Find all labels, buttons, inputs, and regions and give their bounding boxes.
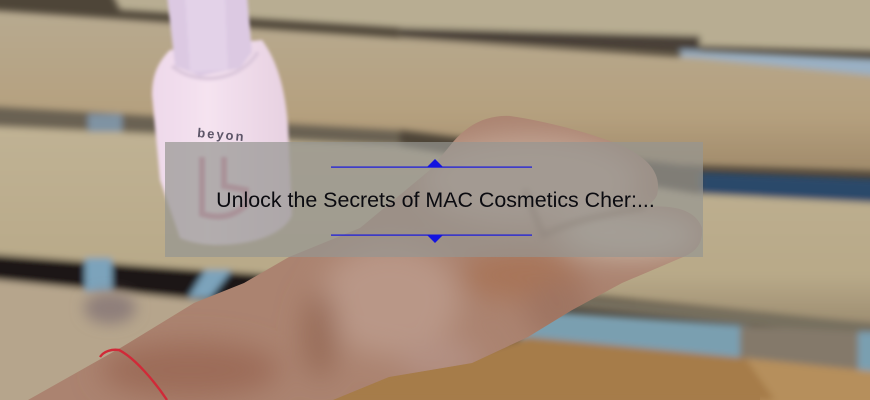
bottle pink logo [202, 157, 246, 217]
base skin [28, 116, 702, 400]
finger crease [572, 212, 617, 224]
plank edge: right [560, 296, 870, 340]
brown gap right lower [740, 326, 858, 374]
neck highlight [185, 0, 228, 72]
support shadow on plank [84, 292, 136, 324]
dark seam [400, 28, 700, 50]
bench supports [88, 114, 122, 132]
wooden plank: bottom-left [0, 276, 240, 400]
bottle [152, 0, 292, 245]
skin shading [100, 135, 700, 398]
blue gap right lower [520, 310, 750, 360]
bottle body [152, 40, 292, 245]
wooden plank: top [95, 0, 870, 52]
wooden plank: third [0, 124, 870, 326]
bottle label: beyon [197, 125, 246, 144]
red bracelet [100, 350, 167, 400]
hand [28, 116, 702, 400]
title overlay panel [165, 142, 703, 257]
title text: Unlock the Secrets of MAC Cosmetics Cher:... [216, 188, 655, 212]
base colour of lower bench [0, 370, 870, 400]
bottle neck [167, 0, 252, 76]
blue seam at right [680, 50, 870, 80]
wooden plank: bottom-right [300, 337, 775, 400]
bottom decorative rule with down arrow [331, 234, 532, 243]
blue support right [858, 332, 870, 376]
bottle collar shadow [172, 52, 258, 78]
seam: left [0, 104, 400, 148]
wooden plank: second [0, 8, 870, 172]
gap: right dark blue [700, 172, 870, 204]
top decorative rule with up arrow [331, 159, 532, 168]
black gap under third plank [0, 254, 260, 304]
